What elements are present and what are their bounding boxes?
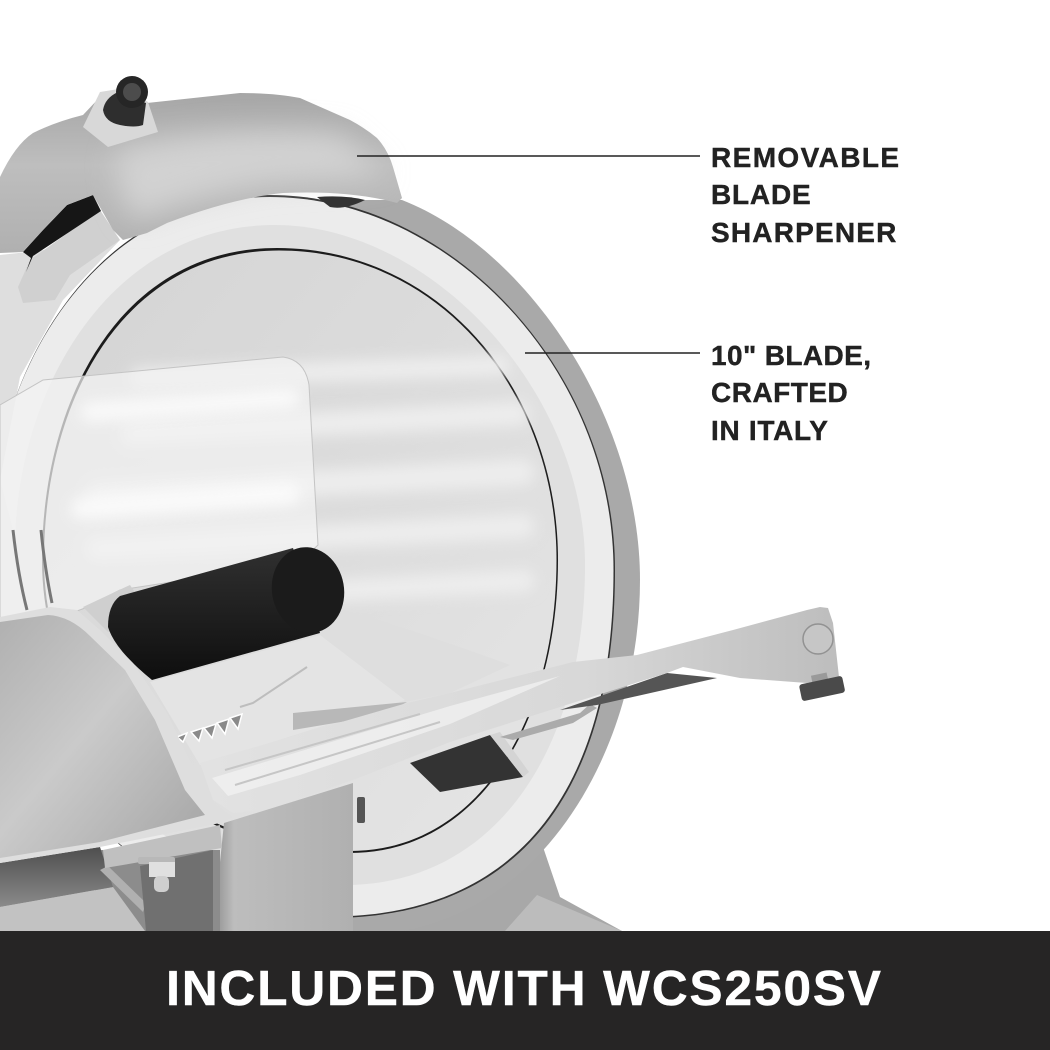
sharpener housing [0, 93, 402, 253]
clear safety guard [0, 357, 318, 640]
mounting bolt [138, 857, 175, 892]
lower base frame [0, 825, 222, 931]
arm support [83, 585, 510, 702]
small screw behind leg [357, 797, 365, 823]
white blade ring [0, 195, 615, 918]
blade ripples [85, 355, 535, 602]
base foot [330, 847, 622, 931]
sharpener slot [18, 195, 120, 303]
callout: 10 inch blade: 10" BLADE, [711, 340, 871, 370]
sharpener knob [83, 76, 158, 147]
lever [410, 732, 529, 792]
callout: removable blade sharpener: BLADE [711, 179, 811, 210]
callout: removable blade sharpener [711, 142, 900, 248]
support leg [213, 783, 353, 931]
callout: 10 inch blade: CRAFTED [711, 377, 848, 408]
callout: 10 inch blade: IN ITALY [711, 414, 829, 446]
callout: 10 inch blade [711, 340, 871, 446]
bottom banner [0, 931, 1050, 1050]
callout: removable blade sharpener: REMOVABLE [711, 142, 900, 172]
blade disc [42, 248, 558, 853]
thickness arm [200, 607, 839, 813]
leader line: sharpener [357, 155, 700, 157]
black handle [108, 541, 351, 680]
outer housing ring [200, 200, 640, 935]
leader line: blade [525, 352, 700, 354]
left housing column [0, 240, 120, 660]
bottom banner: INCLUDED WITH WCS250SV [166, 961, 883, 1016]
arm pivot [803, 624, 833, 654]
food carriage area [150, 635, 407, 765]
left carriage body [0, 607, 233, 863]
callout: removable blade sharpener: SHARPENER [711, 216, 898, 248]
arm bracket [500, 673, 717, 740]
gripping teeth [177, 714, 242, 742]
adjustment screw [799, 672, 845, 701]
